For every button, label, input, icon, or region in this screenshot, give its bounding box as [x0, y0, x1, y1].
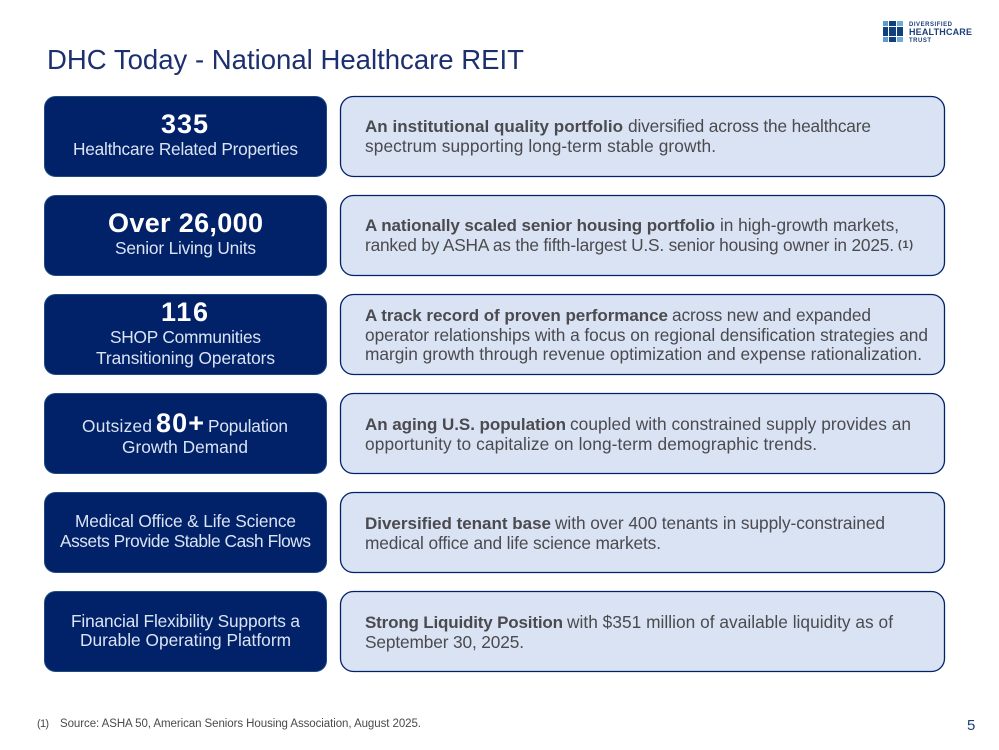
panel: 116 SHOP communities: SHOP Communities: [110, 327, 261, 347]
panel: 335 properties: [44, 96, 326, 176]
panel: track record: margin growth through revenue optimization and expense rationalization.: [365, 344, 922, 364]
panel: track record: across new and expanded: [672, 305, 871, 325]
panel: diversified tenant base: [340, 492, 944, 572]
panel: institutional quality portfolio: An institutional quality portfolio: [365, 117, 623, 136]
panel: 80+ population: Outsized: [82, 416, 152, 436]
panel: 116 SHOP communities: Transitioning Operators: [96, 348, 275, 368]
panel: diversified tenant base: medical office and life science markets.: [365, 533, 661, 553]
panel: track record: [340, 294, 944, 374]
footnote: Source: ASHA 50, American Seniors Housing Association, August 2025.: [60, 718, 421, 730]
panel: 80+ population: Population: [208, 416, 288, 436]
footnote: (1): [37, 718, 49, 730]
panel: strong liquidity: [340, 592, 944, 672]
panel: nationally scaled senior housing: [340, 196, 944, 276]
panel: institutional quality portfolio: spectrum supporting long-term stable growth.: [365, 136, 716, 156]
logo: Diversified Healthcare Trust: [883, 21, 972, 44]
panel: aging population: [340, 394, 944, 474]
panel: medical office and life science: Assets Provide Stable Cash Flows: [60, 531, 311, 551]
logo: Diversified Healthcare Trust: HEALTHCARE: [909, 27, 972, 37]
page number: 5: [967, 717, 975, 734]
panel: medical office and life science: Medical Office & Life Science: [75, 511, 296, 531]
panel: over 26,000 units: Senior Living Units: [115, 238, 256, 258]
panel: strong liquidity: September 30, 2025.: [365, 632, 524, 652]
panel: strong liquidity: Strong Liquidity Position: [365, 613, 563, 632]
panel: 335 properties: 335: [161, 109, 208, 139]
panel: aging population: coupled with constrained supply provides an: [570, 414, 911, 434]
title: DHC Today - National Healthcare REIT: [47, 44, 524, 75]
panel: medical office and life science: [44, 492, 326, 572]
panel: 116 SHOP communities: [44, 294, 326, 374]
panel: nationally scaled senior housing: in high-growth markets,: [720, 215, 899, 235]
panel: track record: operator relationships with a focus on regional densification strategies and: [365, 325, 928, 345]
panel: institutional quality portfolio: diversified across the healthcare: [628, 116, 871, 136]
panel: 80+ population: 80+: [156, 408, 204, 438]
logo: Diversified Healthcare Trust: TRUST: [909, 38, 931, 44]
panel: financial flexibility: Financial Flexibility Supports a: [71, 611, 300, 631]
panel: over 26,000 units: Over 26,000: [108, 208, 263, 238]
panel: aging population: opportunity to capitalize on long-term demographic trends.: [365, 434, 817, 454]
panel: nationally scaled senior housing: (1): [898, 239, 913, 251]
panel: financial flexibility: Durable Operating Platform: [80, 630, 291, 650]
panel: 335 properties: Healthcare Related Properties: [73, 139, 298, 159]
logo: Diversified Healthcare Trust: DIVERSIFIED: [909, 22, 953, 28]
panel: 80+ population: [44, 394, 326, 474]
panel: track record: A track record of proven performance: [365, 306, 668, 325]
panel: nationally scaled senior housing: A nationally scaled senior housing portfolio: [365, 216, 715, 235]
panel: 80+ population: Growth Demand: [122, 437, 248, 457]
panel: nationally scaled senior housing: ranked by ASHA as the fifth-largest U.S. senior housing owner in 2025.: [365, 235, 894, 255]
panel: institutional quality portfolio: [340, 96, 944, 176]
panel: diversified tenant base: with over 400 tenants in supply-constrained: [554, 513, 885, 533]
panel: strong liquidity: with $351 million of available liquidity as of: [566, 612, 893, 632]
panel: 116 SHOP communities: 116: [161, 297, 208, 327]
panel: aging population: An aging U.S. population: [365, 415, 566, 434]
panel: diversified tenant base: Diversified tenant base: [365, 514, 551, 533]
panel: financial flexibility: [44, 592, 326, 672]
panel: over 26,000 units: [44, 196, 326, 276]
